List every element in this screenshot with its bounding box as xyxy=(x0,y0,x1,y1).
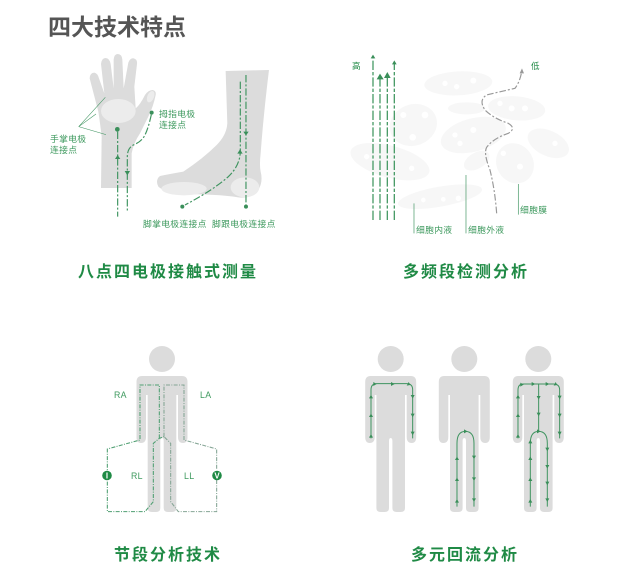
panel: multi-frequency xyxy=(347,55,574,281)
current source I xyxy=(102,471,112,480)
label: low: 低 xyxy=(531,61,540,71)
label: LL: LL xyxy=(184,471,194,481)
label: RL: RL xyxy=(131,471,143,481)
voltage V xyxy=(212,471,222,480)
label: sole electrode: 脚掌电极连接点 xyxy=(143,218,207,229)
label: palm electrode line 2: 连接点 xyxy=(50,144,77,155)
label: RA: RA xyxy=(114,390,127,400)
panel: segmental analysis xyxy=(102,346,222,564)
label: intracellular fluid: 细胞内液 xyxy=(416,224,452,235)
label: thumb electrode: 拇指电极 xyxy=(159,108,195,119)
heading: eight-point: 八点四电极接触式测量 xyxy=(78,262,258,281)
title: 四大技术特点 xyxy=(48,14,186,40)
heading: segmental: 节段分析技术 xyxy=(114,545,222,564)
icon: foot xyxy=(157,70,269,209)
label: extracellular fluid: 细胞外液 xyxy=(468,224,504,235)
panel: multiple current flow xyxy=(365,346,564,564)
cell background xyxy=(347,70,574,214)
label: thumb electrode line 2: 连接点 xyxy=(159,119,186,130)
label: high: 高 xyxy=(352,61,361,71)
icon: hand xyxy=(79,54,156,217)
heading: multi-frequency: 多频段检测分析 xyxy=(403,262,529,281)
label: LA: LA xyxy=(200,390,211,400)
label: heel electrode: 脚跟电极连接点 xyxy=(212,218,276,229)
current source I: I xyxy=(106,472,108,480)
voltage V: V xyxy=(214,472,220,480)
label: cell membrane: 细胞膜 xyxy=(520,204,547,215)
heading: multiple flow: 多元回流分析 xyxy=(411,545,519,564)
frequency arrows xyxy=(371,55,524,233)
label: palm electrode: 手掌电极 xyxy=(50,133,86,144)
figure 2: legs xyxy=(439,346,490,512)
figure 1: arms xyxy=(365,346,416,512)
panel: eight-point electrode xyxy=(50,54,276,281)
figure 3: full body xyxy=(513,346,564,512)
low-frequency path xyxy=(482,72,522,213)
icon: body with circuit xyxy=(136,346,188,512)
